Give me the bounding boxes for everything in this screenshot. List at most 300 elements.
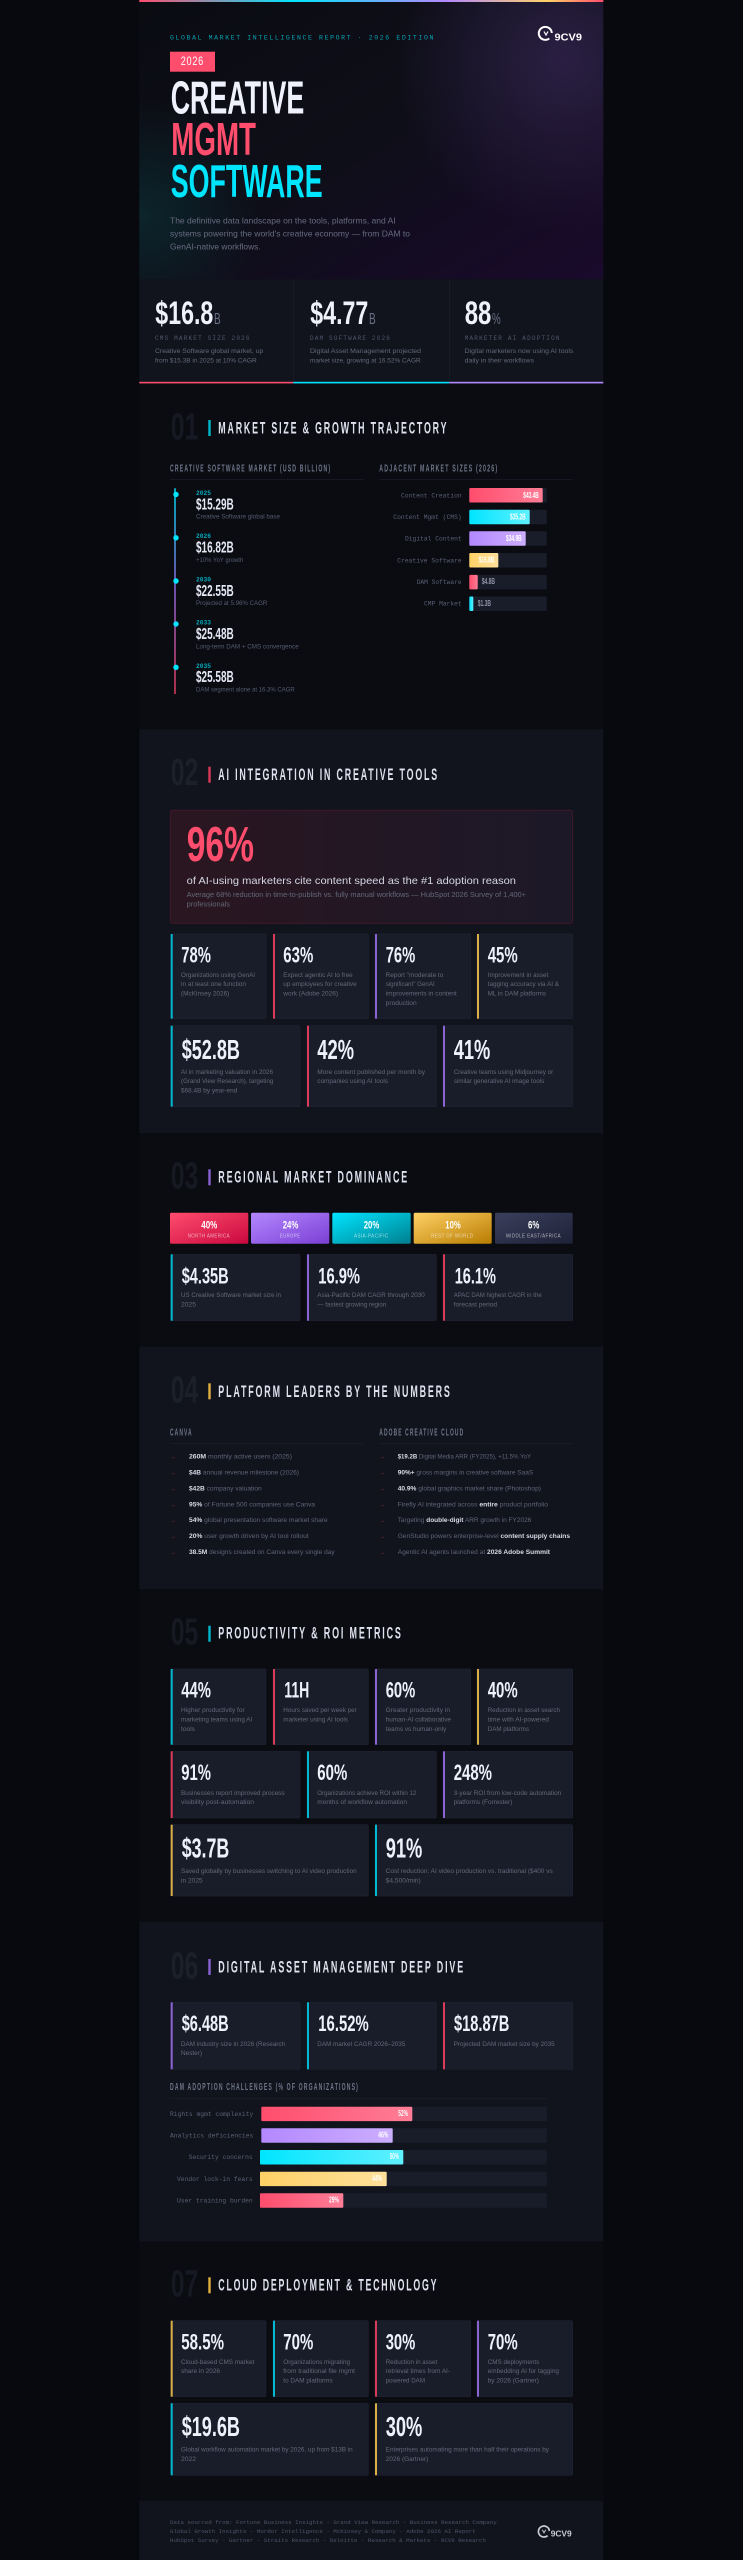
card: 16.9%: 16.9% bbox=[318, 1263, 360, 1288]
list: Canva: → bbox=[170, 1518, 176, 1524]
section heading 04: 04 bbox=[171, 1370, 198, 1412]
section heading 03: REGIONAL MARKET DOMINANCE bbox=[218, 1168, 409, 1187]
card: 91% process visibility: Businesses report improved process bbox=[181, 1790, 285, 1797]
bar: User training burden bbox=[177, 2193, 547, 2208]
section 05: productivity and ROI bbox=[139, 1589, 603, 1922]
logo: 9CV9 bbox=[539, 27, 582, 44]
stat: CMS market size: Creative Software global market, up bbox=[155, 348, 264, 355]
card: $19.6B bbox=[171, 2403, 368, 2475]
card: 11H: Hours saved per week per bbox=[283, 1707, 358, 1714]
bar: Analytics deficiencies: 46% bbox=[378, 2130, 388, 2140]
list: Canva: → bbox=[170, 1454, 176, 1460]
section heading 07: CLOUD DEPLOYMENT & TECHNOLOGY bbox=[218, 2276, 438, 2295]
card: $19.6B: Global workflow automation market by 2026, up from $13B in bbox=[181, 2446, 353, 2454]
section 06: DAM deep dive bbox=[139, 1922, 603, 2242]
card: 78%: 78% bbox=[181, 942, 211, 967]
card: 76%: significant" GenAI bbox=[386, 981, 435, 988]
footer logo: 9CV9 bbox=[538, 2526, 572, 2539]
section heading 05: PRODUCTIVITY & ROI METRICS bbox=[218, 1624, 403, 1643]
timeline: 2025: $15.29B bbox=[196, 496, 234, 513]
region tile: Europe: 24% bbox=[283, 1219, 298, 1231]
list: Adobe Creative Cloud: Targeting double-digit ARR growth in FY2026 bbox=[398, 1517, 532, 1524]
bar chart: adjacent market sizes: ADJACENT MARKET SIZES (2026) bbox=[379, 464, 498, 475]
footer sources: Data sourced from: Fortune Business Insights · Grand View Research · Business Research Company bbox=[170, 2519, 497, 2526]
bar: User training burden: 29% bbox=[329, 2196, 339, 2204]
footer bbox=[139, 2501, 603, 2560]
bar: Analytics deficiencies bbox=[170, 2128, 547, 2143]
card: 60%: Greater productivity in bbox=[386, 1707, 450, 1714]
card: 91% cost reduction: 91% bbox=[386, 1832, 422, 1863]
timeline: 2030 bbox=[173, 576, 268, 607]
list: Adobe Creative Cloud bbox=[379, 1427, 573, 1556]
card: 45%: Improvement in asset bbox=[488, 972, 549, 979]
bar: Content Mgmt: $35.2B bbox=[510, 512, 526, 521]
card: 58.5%: share in 2026 bbox=[181, 2368, 220, 2375]
card: 78%: (McKinsey 2026) bbox=[181, 990, 229, 998]
bar: Creative Software: $16.8B bbox=[479, 556, 494, 565]
timeline: 2035 bbox=[173, 663, 295, 694]
card: 63%: Expect agentic AI to free bbox=[283, 972, 353, 979]
timeline: 2026: $16.82B bbox=[196, 540, 234, 557]
title: CREATIVE bbox=[171, 72, 304, 124]
card: 70% CMS deployments bbox=[477, 2321, 573, 2397]
bar: Content Creation: Content Creation bbox=[401, 492, 462, 500]
section heading 02: AI INTEGRATION IN CREATIVE TOOLS bbox=[218, 765, 439, 784]
timeline: 2033: 2033 bbox=[196, 620, 211, 626]
card: 16.9%: Asia-Pacific DAM CAGR through 2030 bbox=[317, 1292, 425, 1299]
card: $4.35B: $4.35B bbox=[182, 1263, 229, 1288]
bar: Rights mgmt complexity: 52% bbox=[398, 2109, 408, 2118]
card: 60% ROI: 60% bbox=[317, 1760, 347, 1785]
stat: DAM software bbox=[310, 295, 421, 364]
card: 60% ROI: months of workflow automation bbox=[317, 1799, 407, 1806]
section 02: AI integration bbox=[139, 729, 603, 1133]
timeline: 2030: 2030 bbox=[196, 576, 211, 584]
section heading 03: 03 bbox=[171, 1155, 198, 1197]
section heading 05 bbox=[171, 1611, 403, 1653]
stat: CMS market size: CMS MARKET SIZE 2026 bbox=[155, 335, 251, 342]
section heading 07: 07 bbox=[171, 2264, 198, 2306]
timeline panel: CREATIVE SOFTWARE MARKET (USD BILLION) bbox=[170, 464, 331, 475]
card: 91% cost reduction bbox=[375, 1825, 573, 1896]
region tile: Europe: EUROPE bbox=[280, 1234, 300, 1240]
bar: Content Creation bbox=[401, 488, 547, 502]
hero description bbox=[170, 216, 410, 251]
card: 91% process visibility bbox=[171, 1751, 300, 1818]
stat: CMS market size bbox=[155, 295, 264, 364]
card: 40%: time with AI-powered bbox=[488, 1716, 549, 1724]
timeline: 2033: $25.48B bbox=[196, 626, 234, 643]
stat: marketer AI adoption: % bbox=[492, 311, 501, 328]
bar: Content Mgmt bbox=[393, 510, 547, 524]
card: 30% enterprises: Enterprises automating more than half their operations by bbox=[386, 2446, 550, 2454]
list: Canva: 20% user growth driven by AI tool rollout bbox=[189, 1533, 309, 1540]
card: 16.1%: 16.1% bbox=[455, 1263, 496, 1288]
footer sources bbox=[170, 2519, 497, 2544]
card: 78%: in at least one function bbox=[181, 981, 246, 988]
list: Adobe Creative Cloud: 40.9% global graphics market share (Photoshop) bbox=[398, 1485, 541, 1492]
list: Canva: → bbox=[170, 1470, 176, 1476]
bar: DAM Software bbox=[417, 575, 547, 589]
card: 63% bbox=[273, 934, 368, 1019]
card: $6.48B: DAM industry size in 2026 (Research bbox=[181, 2041, 285, 2048]
bar: DAM Software: DAM Software bbox=[417, 579, 462, 586]
card: 76%: improvements in content bbox=[386, 990, 457, 998]
card: 42%: 42% bbox=[317, 1034, 354, 1065]
region tile: Middle East/Africa: 6% bbox=[528, 1219, 539, 1231]
bar: Content Creation: $43.4B bbox=[523, 491, 539, 500]
list: Adobe Creative Cloud: Firefly AI integrated across entire product portfolio bbox=[398, 1501, 548, 1508]
card: 30% retrieval bbox=[375, 2321, 471, 2397]
title: MGMT bbox=[171, 113, 256, 165]
card: 44%: tools bbox=[181, 1726, 195, 1733]
stat: DAM software: DAM SOFTWARE 2026 bbox=[310, 335, 391, 342]
card: 41%: Creative teams using Midjourney or bbox=[454, 1069, 554, 1076]
stat: marketer AI adoption: 88 bbox=[465, 295, 491, 331]
card: 44%: Higher productivity for bbox=[181, 1707, 246, 1714]
card: $3.7B: Saved globally by businesses switching to AI video production bbox=[181, 1868, 357, 1875]
bar: Vendor lock-in fears: Vendor lock-in fears bbox=[177, 2176, 253, 2183]
card: 91% process visibility: 91% bbox=[181, 1760, 211, 1785]
list: Canva: → bbox=[170, 1502, 176, 1508]
timeline: 2033 bbox=[173, 620, 299, 650]
list: Canva: 95% of Fortune 500 companies use Canva bbox=[189, 1501, 315, 1508]
card: 58.5%: Cloud-based CMS market bbox=[181, 2359, 255, 2366]
card: 45%: tagging accuracy via AI & bbox=[488, 981, 560, 988]
card: 70% CMS deployments: by 2026 (Gartner) bbox=[488, 2378, 539, 2384]
card: 58.5%: 58.5% bbox=[181, 2329, 224, 2354]
card: $3.7B: in 2025 bbox=[181, 1878, 203, 1884]
bar: CMP Market: CMP Market bbox=[424, 601, 462, 608]
card: 60%: human-AI collaborative bbox=[386, 1716, 451, 1724]
stat: DAM software: market size, growing at 16.52% CAGR bbox=[310, 357, 421, 364]
card: 45%: 45% bbox=[488, 942, 518, 967]
card: $4.35B bbox=[171, 1254, 300, 1321]
card: $52.8B: $52.8B bbox=[182, 1034, 240, 1065]
bar: Content Mgmt: Content Mgmt (CMS) bbox=[393, 514, 462, 521]
list: Canva: 260M monthly active users (2025) bbox=[189, 1453, 292, 1460]
title: SOFTWARE bbox=[171, 155, 323, 207]
region tile: Rest of World: 10% bbox=[445, 1219, 461, 1231]
card: 70% CMS deployments: 70% bbox=[488, 2329, 518, 2354]
logo: 9CV9: 9CV9 bbox=[554, 32, 582, 44]
section heading 04 bbox=[171, 1370, 452, 1412]
card: 16.9% bbox=[307, 1254, 436, 1321]
card: 11H: 11H bbox=[284, 1677, 309, 1702]
timeline: 2030: Projected at 5.96% CAGR bbox=[196, 600, 268, 607]
list: Canva: 54% global presentation software market share bbox=[189, 1517, 328, 1524]
card: $18.87B: Projected DAM market size by 2035 bbox=[454, 2041, 555, 2048]
bar: Security concerns bbox=[189, 2150, 547, 2164]
hero stat card: 96%: Average 68% reduction in time-to-publish vs. fully manual workflows — HubSpot 2026 Survey of 1,400+ bbox=[187, 892, 526, 899]
bar: Rights mgmt complexity bbox=[170, 2107, 547, 2121]
card: $19.6B: $19.6B bbox=[182, 2411, 240, 2442]
list: Adobe Creative Cloud: GenStudio powers enterprise-level content supply chains bbox=[398, 1533, 570, 1540]
card: 44%: marketing teams using AI bbox=[181, 1716, 253, 1724]
hero description: GenAI-native workflows. bbox=[170, 242, 261, 251]
card: 63%: 63% bbox=[283, 942, 313, 967]
hero stat card: 96%: professionals bbox=[187, 901, 231, 908]
card: 44% bbox=[171, 1669, 266, 1745]
card: $4.35B: 2025 bbox=[181, 1302, 196, 1309]
card: 16.1% bbox=[443, 1254, 573, 1321]
stat: CMS market size: from $15.3B in 2025 at 10% CAGR bbox=[155, 357, 257, 364]
card: 30% retrieval: powered DAM bbox=[386, 2378, 425, 2384]
region tile: Europe bbox=[251, 1213, 329, 1244]
stats strip bbox=[139, 279, 603, 384]
timeline: 2035: DAM segment alone at 16.3% CAGR bbox=[196, 687, 295, 694]
region tile: Asia-Pacific bbox=[332, 1213, 411, 1244]
card: 41% bbox=[443, 1026, 573, 1107]
card: $3.7B: $3.7B bbox=[182, 1832, 229, 1863]
hero stat card: 96% bbox=[170, 810, 573, 923]
card: $6.48B: $6.48B bbox=[182, 2011, 229, 2036]
card: 70% migrating: to DAM platforms bbox=[283, 2378, 333, 2384]
title bbox=[171, 72, 323, 207]
card: 248%: 3-year ROI from low-code automation bbox=[454, 1790, 562, 1797]
region tile: North America bbox=[170, 1213, 248, 1244]
bar: Analytics deficiencies: Analytics deficiencies bbox=[170, 2132, 254, 2140]
bar chart: adjacent market sizes bbox=[379, 464, 573, 611]
card: 30% retrieval: Reduction in asset bbox=[386, 2359, 438, 2366]
card: $52.8B: $68.4B by year-end bbox=[181, 1088, 238, 1094]
card: 91% process visibility: visibility post-automation bbox=[181, 1799, 254, 1806]
stat: DAM software: $4.77 bbox=[310, 295, 368, 331]
card: 76%: Report "moderate to bbox=[386, 972, 444, 979]
region tile: Rest of World: REST OF WORLD bbox=[431, 1234, 473, 1240]
card: 91% cost reduction: Cost reduction: AI video production vs. traditional ($400 vs bbox=[386, 1868, 553, 1875]
region tile: North America: 40% bbox=[201, 1219, 217, 1231]
card: 70% migrating: from traditional file mgmt bbox=[283, 2368, 355, 2375]
region tile: Asia-Pacific: 20% bbox=[364, 1219, 379, 1231]
card: 40%: DAM platforms bbox=[488, 1726, 529, 1733]
list: Canva: $4B annual revenue milestone (2026) bbox=[189, 1469, 299, 1476]
region tile: Asia-Pacific: ASIA-PACIFIC bbox=[354, 1234, 389, 1240]
bar: DAM Software: $4.8B bbox=[482, 577, 495, 586]
card: 60% ROI: Organizations achieve ROI within 12 bbox=[317, 1790, 417, 1797]
timeline: 2025: 2025 bbox=[196, 490, 211, 497]
stat: DAM software: B bbox=[369, 311, 376, 328]
card: $3.7B bbox=[171, 1825, 368, 1896]
list: Adobe Creative Cloud: → bbox=[379, 1518, 385, 1524]
eyebrow: GLOBAL MARKET INTELLIGENCE REPORT · 2026 EDITION bbox=[170, 34, 435, 41]
card: 63%: up employees for creative bbox=[283, 981, 357, 988]
list: Adobe Creative Cloud: Agentic AI agents launched at 2026 Adobe Summit bbox=[398, 1549, 551, 1556]
card: 60%: teams vs human-only bbox=[386, 1726, 447, 1733]
bar: Digital Content bbox=[405, 531, 547, 546]
section heading 03 bbox=[171, 1155, 409, 1197]
card: 70% migrating: 70% bbox=[283, 2329, 313, 2354]
region tile: Middle East/Africa: MIDDLE EAST/AFRICA bbox=[506, 1234, 561, 1240]
card: 40%: 40% bbox=[488, 1677, 518, 1702]
list: Canva: $42B company valuation bbox=[189, 1485, 262, 1492]
bar: Vendor lock-in fears bbox=[177, 2172, 547, 2186]
section heading 02: 02 bbox=[171, 752, 198, 794]
card: $18.87B: $18.87B bbox=[454, 2011, 509, 2036]
stat: CMS market size: B bbox=[214, 311, 221, 328]
card: 63%: work (Adobe 2026) bbox=[282, 990, 338, 998]
list: Adobe Creative Cloud: → bbox=[379, 1534, 385, 1540]
list: Canva: CANVA bbox=[170, 1427, 193, 1438]
card: 76%: production bbox=[386, 1000, 417, 1007]
card: 41%: similar generative AI image tools bbox=[454, 1078, 544, 1085]
card: 248% bbox=[443, 1751, 573, 1818]
card: $6.48B: Nester) bbox=[181, 2050, 202, 2057]
footer sources: HubSpot Survey · Gartner · Straits Research · Deloitte · Research & Markets · 9CV9 Research bbox=[170, 2537, 486, 2544]
card: 42% bbox=[307, 1026, 436, 1107]
card: 30% enterprises: 2026 (Gartner) bbox=[386, 2456, 428, 2463]
bar chart: DAM adoption challenges: DAM ADOPTION CHALLENGES (% OF ORGANIZATIONS) bbox=[170, 2082, 359, 2093]
list: Adobe Creative Cloud: → bbox=[379, 1486, 385, 1492]
region tile: Rest of World bbox=[414, 1213, 492, 1244]
hero stat card: 96%: 96% bbox=[187, 818, 254, 872]
card: 248%: platforms (Forrester) bbox=[454, 1799, 512, 1806]
region tile: North America: NORTH AMERICA bbox=[188, 1234, 230, 1240]
section 01: market size bbox=[139, 384, 603, 729]
card: 45%: ML in DAM platforms bbox=[488, 990, 546, 998]
card: 70% CMS deployments: embedding AI for tagging bbox=[488, 2368, 559, 2375]
card: 16.52% bbox=[307, 2002, 436, 2069]
card: 11H bbox=[273, 1669, 368, 1745]
bar: Vendor lock-in fears: 44% bbox=[372, 2174, 382, 2183]
section heading 06: DIGITAL ASSET MANAGEMENT DEEP DIVE bbox=[218, 1957, 465, 1976]
card: 70% migrating bbox=[273, 2321, 368, 2397]
timeline: 2035: $25.58B bbox=[196, 669, 234, 686]
bar: CMP Market: $1.3B bbox=[478, 599, 491, 608]
bar: Digital Content: $34.9B bbox=[506, 534, 522, 543]
card: 41%: 41% bbox=[454, 1034, 490, 1065]
year badge bbox=[170, 52, 215, 72]
card: 40% bbox=[477, 1669, 573, 1745]
timeline: 2026: +10% YoY growth bbox=[196, 557, 244, 564]
list: Adobe Creative Cloud: → bbox=[379, 1454, 385, 1460]
footer sources: Global Growth Insights · Mordor Intelligence · McKinsey & Company · Adobe 2026 AI Report bbox=[170, 2528, 476, 2535]
stat: CMS market size: $16.8 bbox=[155, 295, 213, 331]
list: Canva: → bbox=[170, 1486, 176, 1492]
card: 16.1%: APAC DAM highest CAGR in the bbox=[454, 1292, 542, 1299]
card: 42%: companies using AI tools bbox=[317, 1078, 388, 1085]
hero description: systems powering the world's creative economy — from DAM to bbox=[170, 229, 410, 238]
card: $6.48B bbox=[171, 2002, 300, 2069]
footer logo: 9CV9: 9CV9 bbox=[551, 2529, 572, 2539]
card: $52.8B: AI in marketing valuation in 2026 bbox=[181, 1069, 273, 1076]
stat: DAM software: Digital Asset Management projected bbox=[310, 348, 421, 355]
bar: Creative Software bbox=[397, 553, 547, 568]
list: Adobe Creative Cloud: ADOBE CREATIVE CLOUD bbox=[379, 1427, 464, 1438]
section 04: platform leaders bbox=[139, 1347, 603, 1589]
section heading 07 bbox=[171, 2264, 438, 2306]
timeline: 2035: 2035 bbox=[196, 663, 211, 670]
stat: marketer AI adoption bbox=[465, 295, 573, 364]
timeline: 2025 bbox=[173, 490, 281, 521]
card: 16.52%: DAM market CAGR 2026–2035 bbox=[317, 2041, 406, 2048]
card: 70% CMS deployments: CMS deployments bbox=[488, 2359, 539, 2366]
card: 16.9%: — fastest growing region bbox=[317, 1302, 387, 1309]
region tile: Middle East/Africa bbox=[495, 1213, 573, 1244]
card: 45% bbox=[477, 934, 573, 1019]
section 03: regional dominance bbox=[139, 1133, 603, 1347]
stat: marketer AI adoption: MARKETER AI ADOPTION bbox=[465, 335, 561, 342]
card: 16.52%: 16.52% bbox=[318, 2011, 369, 2036]
timeline panel bbox=[170, 464, 364, 694]
card: 30% retrieval: retrieval times from AI- bbox=[386, 2368, 450, 2375]
timeline: 2026 bbox=[173, 533, 244, 564]
card: 60% ROI bbox=[307, 1751, 436, 1818]
section 07: cloud deployment bbox=[139, 2242, 603, 2501]
section heading 01: 01 bbox=[171, 406, 198, 448]
card: 16.1%: forecast period bbox=[454, 1302, 497, 1309]
bar: Security concerns: Security concerns bbox=[189, 2154, 253, 2161]
card: 11H: marketer using AI tools bbox=[283, 1716, 348, 1724]
stat: marketer AI adoption: Digital marketers now using AI tools bbox=[465, 348, 573, 355]
hero panel bbox=[139, 0, 603, 279]
card: 78% bbox=[171, 934, 266, 1019]
card: 44%: 44% bbox=[181, 1677, 211, 1702]
bar: User training burden: User training burden bbox=[177, 2198, 253, 2204]
bar: Creative Software: Creative Software bbox=[397, 557, 462, 564]
timeline: 2025: Creative Software global base bbox=[196, 514, 281, 521]
hero description: The definitive data landscape on the tools, platforms, and AI bbox=[170, 216, 396, 225]
card: 248%: 248% bbox=[454, 1760, 492, 1785]
list: Adobe Creative Cloud: 90%+ gross margins in creative software SaaS bbox=[398, 1469, 534, 1476]
list: Adobe Creative Cloud: → bbox=[379, 1550, 385, 1556]
section heading 01 bbox=[171, 406, 448, 448]
list: Adobe Creative Cloud: → bbox=[379, 1502, 385, 1508]
card: $52.8B: (Grand View Research), targeting bbox=[181, 1078, 274, 1085]
card: $18.87B bbox=[443, 2002, 573, 2069]
list: Canva bbox=[170, 1427, 364, 1556]
section heading 01: MARKET SIZE & GROWTH TRAJECTORY bbox=[218, 418, 448, 438]
card: 30% retrieval: 30% bbox=[386, 2329, 415, 2354]
timeline: 2033: Long-term DAM + CMS convergence bbox=[196, 643, 299, 650]
section heading 06: 06 bbox=[171, 1945, 198, 1987]
section heading 04: PLATFORM LEADERS BY THE NUMBERS bbox=[218, 1382, 452, 1401]
card: 76% bbox=[375, 934, 471, 1019]
card: 78%: Organizations using GenAI bbox=[181, 972, 255, 979]
card: 60% bbox=[375, 1669, 471, 1745]
list: Canva: → bbox=[170, 1534, 176, 1540]
timeline: 2030: $22.55B bbox=[196, 583, 234, 600]
card: 42%: More content published per month by bbox=[317, 1069, 426, 1076]
card: $4.35B: US Creative Software market size in bbox=[181, 1292, 281, 1299]
card: 58.5% bbox=[171, 2321, 266, 2397]
list: Adobe Creative Cloud: $19.2B Digital Media ARR (FY2025), +11.5% YoY bbox=[398, 1453, 531, 1460]
card: 70% migrating: Organizations migrating bbox=[283, 2359, 350, 2366]
section heading 06 bbox=[171, 1945, 465, 1987]
card: 40%: Reduction in asset search bbox=[488, 1707, 560, 1714]
bar chart: DAM adoption challenges bbox=[170, 2082, 547, 2208]
card: $19.6B: 2022 bbox=[181, 2456, 196, 2463]
card: 30% enterprises bbox=[375, 2403, 573, 2475]
card: 76%: 76% bbox=[386, 942, 415, 967]
timeline: 2026: 2026 bbox=[196, 533, 211, 540]
section heading 02 bbox=[171, 752, 439, 794]
card: 60%: 60% bbox=[386, 1677, 415, 1702]
list: Canva: 38.5M designs created on Canva every single day bbox=[189, 1549, 335, 1556]
list: Adobe Creative Cloud: → bbox=[379, 1470, 385, 1476]
bar: Digital Content: Digital Content bbox=[405, 536, 462, 543]
hero stat card: 96%: of AI-using marketers cite content speed as the #1 adoption reason bbox=[187, 876, 516, 887]
card: 30% enterprises: 30% bbox=[386, 2411, 422, 2442]
bar: CMP Market bbox=[424, 596, 547, 611]
year badge: 2026 bbox=[181, 54, 204, 68]
bar: Rights mgmt complexity: Rights mgmt complexity bbox=[170, 2111, 254, 2118]
card: 91% cost reduction: $4,500/min) bbox=[386, 1878, 421, 1884]
section heading 05: 05 bbox=[171, 1611, 198, 1653]
card: $52.8B bbox=[171, 1026, 300, 1107]
list: Canva: → bbox=[170, 1550, 176, 1556]
bar: Security concerns: 50% bbox=[390, 2152, 399, 2161]
